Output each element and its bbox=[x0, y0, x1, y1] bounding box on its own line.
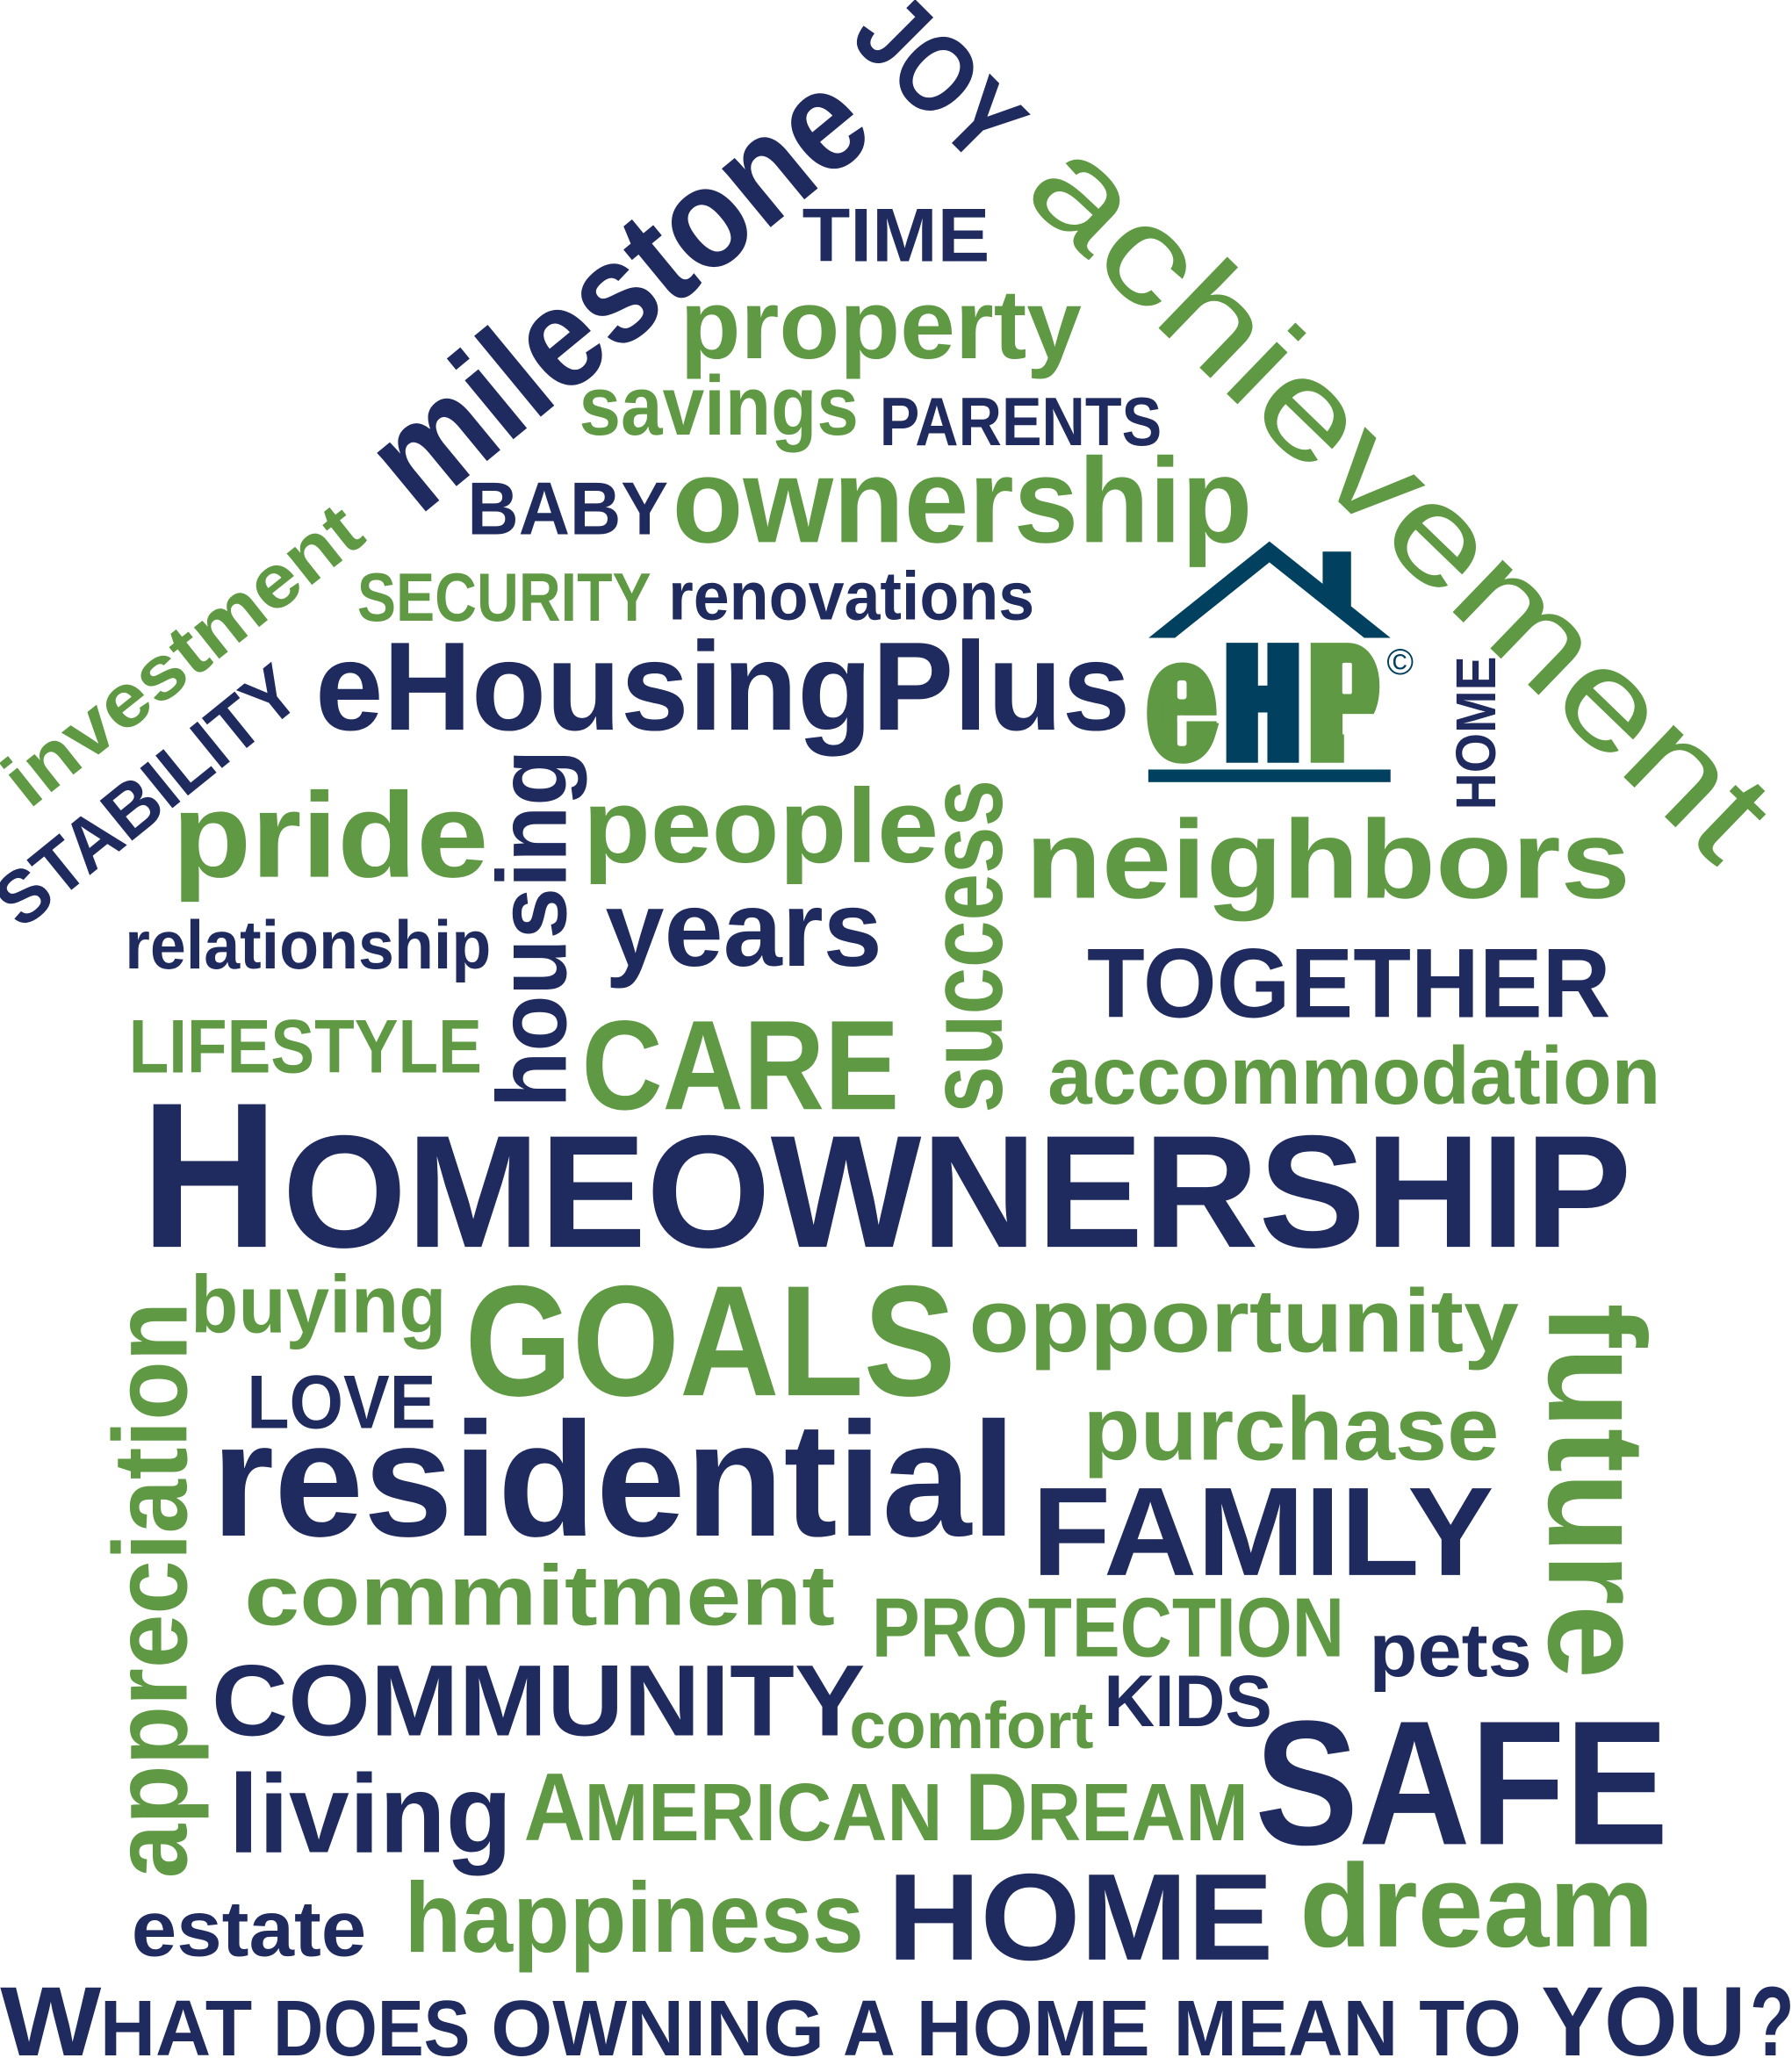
word: KIDS: KIDS bbox=[1104, 1659, 1272, 1742]
logo letter H: H bbox=[1231, 630, 1294, 774]
word: relationship: relationship bbox=[125, 908, 491, 983]
word: milestone: milestone bbox=[335, 37, 898, 541]
word: ownership: ownership bbox=[673, 433, 1252, 568]
word: estate: estate bbox=[132, 1885, 366, 1973]
logo copyright mark: © bbox=[1386, 641, 1414, 682]
word: GOALS: GOALS bbox=[464, 1254, 956, 1429]
title: What does owning a home mean to you? bbox=[0, 1967, 1792, 2058]
word: success vertical: success bbox=[908, 780, 1025, 1113]
word: opportunity: opportunity bbox=[968, 1271, 1519, 1371]
word: property: property bbox=[680, 270, 1082, 379]
word: neighbors: neighbors bbox=[1026, 797, 1630, 922]
word: TOGETHER: TOGETHER bbox=[1087, 929, 1610, 1039]
word: dream: dream bbox=[1299, 1839, 1654, 1972]
word: American Dream: MERICAN bbox=[584, 1767, 943, 1858]
word: savings: savings bbox=[579, 359, 859, 453]
word: LIFESTYLE: LIFESTYLE bbox=[129, 1004, 482, 1089]
word: residential: residential bbox=[212, 1389, 1016, 1571]
logo letter P: P bbox=[1315, 630, 1371, 774]
word: American Dream: D bbox=[965, 1754, 1028, 1861]
word: SAFE: SAFE bbox=[1255, 1683, 1668, 1882]
logo letter e: e bbox=[1150, 618, 1213, 783]
word: years: years bbox=[605, 868, 882, 989]
word: eHousingPlus: eHousingPlus bbox=[315, 616, 1130, 757]
word: FAMILY: FAMILY bbox=[1032, 1462, 1493, 1602]
word: appreciation vertical: appreciation bbox=[93, 1302, 210, 1878]
word: buying: buying bbox=[191, 1258, 446, 1349]
logo: eHP house bbox=[1148, 542, 1414, 783]
word: pride: pride bbox=[172, 768, 488, 903]
word: renovations: renovations bbox=[668, 559, 1034, 635]
word: LOVE: LOVE bbox=[247, 1360, 436, 1444]
word: people: people bbox=[583, 768, 939, 885]
word: HOMEOWNERSHIP bbox=[140, 1060, 1631, 1292]
word: commitment: commitment bbox=[244, 1548, 835, 1644]
word: CARE: CARE bbox=[581, 994, 899, 1136]
word: purchase: purchase bbox=[1083, 1378, 1499, 1479]
word: American Dream bbox=[524, 1754, 1249, 1861]
word: achievement: achievement bbox=[1000, 105, 1792, 889]
word: PROTECTION: PROTECTION bbox=[872, 1581, 1344, 1675]
word: HOME vertical: HOME bbox=[1444, 656, 1508, 810]
word: HOMEOWNERSHIP: H bbox=[140, 1060, 278, 1292]
word: living: living bbox=[228, 1751, 512, 1875]
word: American Dream: A bbox=[524, 1754, 586, 1861]
word: American Dream: REAM bbox=[1026, 1767, 1249, 1858]
logo roof and chimney bbox=[1148, 542, 1391, 638]
word: pets: pets bbox=[1369, 1608, 1532, 1693]
logo letter H bbox=[1231, 630, 1294, 774]
word: HOME: HOME bbox=[888, 1848, 1273, 1986]
word: accommodation: accommodation bbox=[1047, 1030, 1660, 1121]
word: TIME: TIME bbox=[802, 193, 990, 277]
word: future vertical: future bbox=[1519, 1303, 1673, 1679]
word: PARENTS: PARENTS bbox=[880, 385, 1162, 460]
word: HOMEOWNERSHIP: OMEOWNERSHIP bbox=[283, 1102, 1631, 1281]
word: happiness: happiness bbox=[405, 1862, 864, 1974]
word: SECURITY: SECURITY bbox=[357, 560, 651, 636]
word: comfort: comfort bbox=[849, 1688, 1093, 1762]
word: housing vertical: housing bbox=[478, 750, 587, 1108]
word: COMMUNITY: COMMUNITY bbox=[212, 1644, 865, 1757]
logo base bar bbox=[1148, 769, 1391, 782]
word: BABY: BABY bbox=[467, 467, 668, 550]
